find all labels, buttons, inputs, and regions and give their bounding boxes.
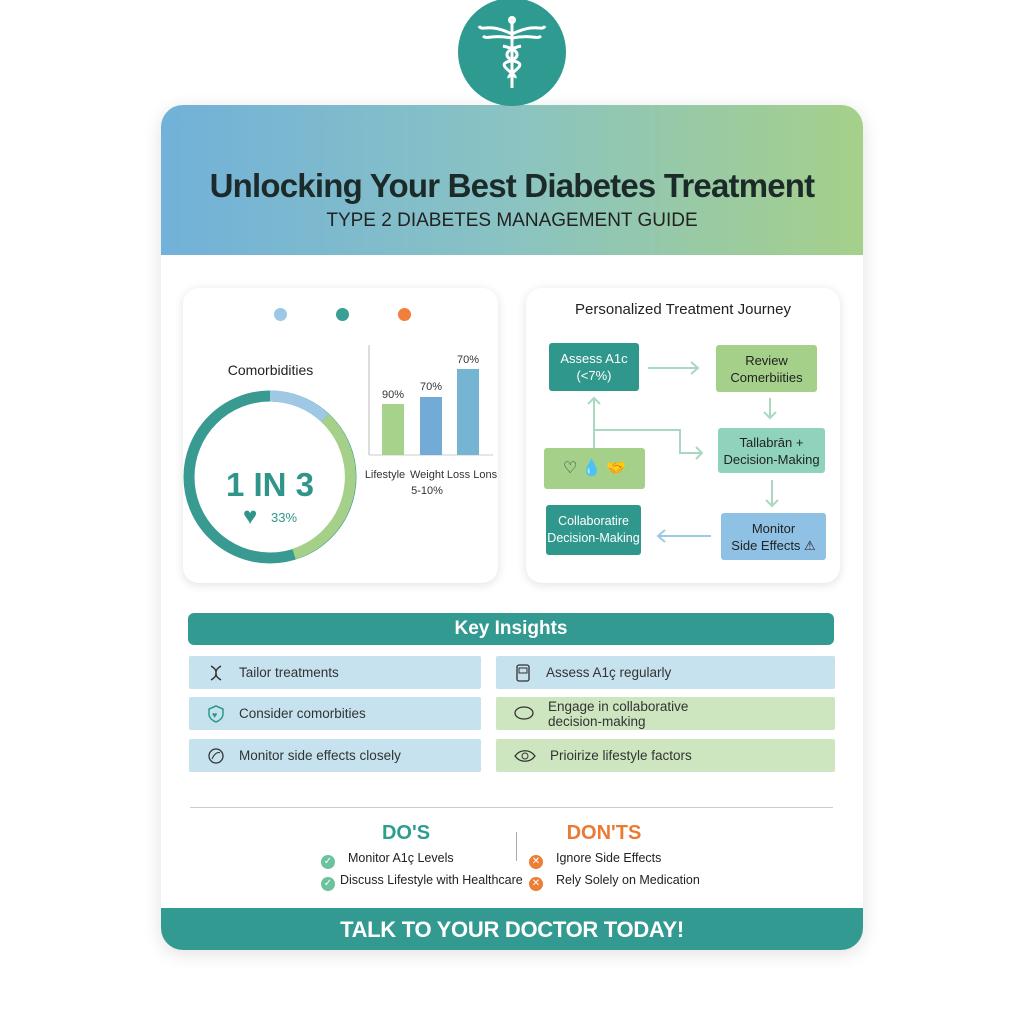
insight: tailor: Tailor treatments — [239, 665, 339, 680]
step: assess A1c: Assess A1c — [560, 351, 628, 366]
step: review comorbidities: Comerbiities — [730, 370, 803, 384]
donts column: Ignore Side Effects — [556, 851, 661, 865]
insight: engage — [496, 697, 835, 730]
dos column: ✓ — [324, 856, 332, 867]
step: collaborative — [546, 505, 641, 555]
header band — [161, 105, 863, 255]
donts column: ✕ — [532, 856, 540, 867]
bar chart: 70% — [457, 354, 479, 366]
insight: comorbidities — [189, 697, 481, 730]
insight: comorbidities: Consider comorbities — [239, 706, 366, 721]
insight: monitor: Monitor side effects closely — [239, 748, 401, 763]
legend dots — [274, 308, 287, 321]
donts column: DON'TS — [567, 822, 641, 844]
insight: assess: Assess A1ç regularly — [546, 665, 671, 680]
icons strip — [544, 448, 645, 489]
footer bar: TALK TO YOUR DOCTOR TODAY! — [340, 917, 684, 942]
bar chart: Weight — [410, 469, 444, 481]
panel: comorbidities stats — [183, 288, 498, 583]
dos column: Monitor A1ç Levels — [348, 851, 454, 865]
bar chart: 70% — [420, 381, 442, 393]
icons strip: ♡ 💧 🤝 — [563, 460, 626, 477]
step: tailoring: Decision-Making — [723, 452, 820, 466]
donut chart: 33% — [271, 510, 297, 525]
insight: assess — [496, 656, 835, 689]
donut chart: ♥ — [243, 503, 257, 530]
step: assess A1c: (<7%) — [576, 368, 612, 383]
arrows — [587, 361, 779, 543]
donut label: Comorbidities — [228, 362, 313, 378]
footer bar — [161, 908, 863, 950]
insight: monitor — [189, 739, 481, 772]
step: review comorbidities: Review — [745, 352, 788, 368]
dos column: DO'S — [382, 822, 430, 844]
donts column — [529, 822, 700, 891]
key insights header: Key Insights — [454, 618, 567, 639]
insight: tailor — [189, 656, 481, 689]
step: monitor side effects — [721, 513, 826, 560]
step: monitor side effects: Side Effects ⚠ — [731, 538, 816, 552]
key insights header — [188, 613, 834, 645]
divider — [190, 807, 833, 808]
donut chart: 1 IN 3 — [226, 466, 314, 503]
step: collaborative: Collaboratire — [558, 514, 629, 528]
insights list — [189, 656, 835, 772]
heading: Personalized Treatment Journey — [575, 301, 791, 318]
subtitle: TYPE 2 DIABETES MANAGEMENT GUIDE — [326, 210, 698, 231]
step: tailoring — [718, 428, 825, 473]
icon: caduceus logo — [458, 0, 566, 106]
title: Unlocking Your Best Diabetes Treatment — [210, 167, 814, 204]
donts column: Rely Solely on Medication — [556, 873, 700, 887]
dos column: Discuss Lifestyle with Healthcare — [340, 873, 523, 887]
bar chart: Loss Lons — [447, 469, 498, 481]
step: tailoring: Tallabrān + — [740, 434, 803, 450]
donts column: ✕ — [532, 878, 540, 889]
insight: lifestyle — [496, 739, 835, 772]
bar chart: 90% — [382, 389, 404, 401]
insight: engage: Engage in collaborative — [548, 698, 688, 714]
panel: treatment journey — [526, 288, 840, 583]
card — [161, 105, 863, 950]
dos column: ✓ — [324, 878, 332, 889]
dos column — [321, 822, 523, 891]
donut chart — [184, 390, 356, 564]
insight: lifestyle: Prioirize lifestyle factors — [550, 748, 692, 763]
step: review comorbidities — [716, 345, 817, 392]
bar chart: 5-10% — [411, 485, 443, 497]
step: monitor side effects: Monitor — [752, 520, 795, 536]
bar chart — [365, 345, 498, 497]
step: collaborative: Decision-Making — [547, 531, 640, 545]
insight: engage: decision-making — [548, 714, 646, 728]
insight: comorbidities: ♥ — [212, 710, 217, 720]
step: assess A1c — [549, 343, 639, 391]
bar chart: Lifestyle — [365, 469, 405, 481]
